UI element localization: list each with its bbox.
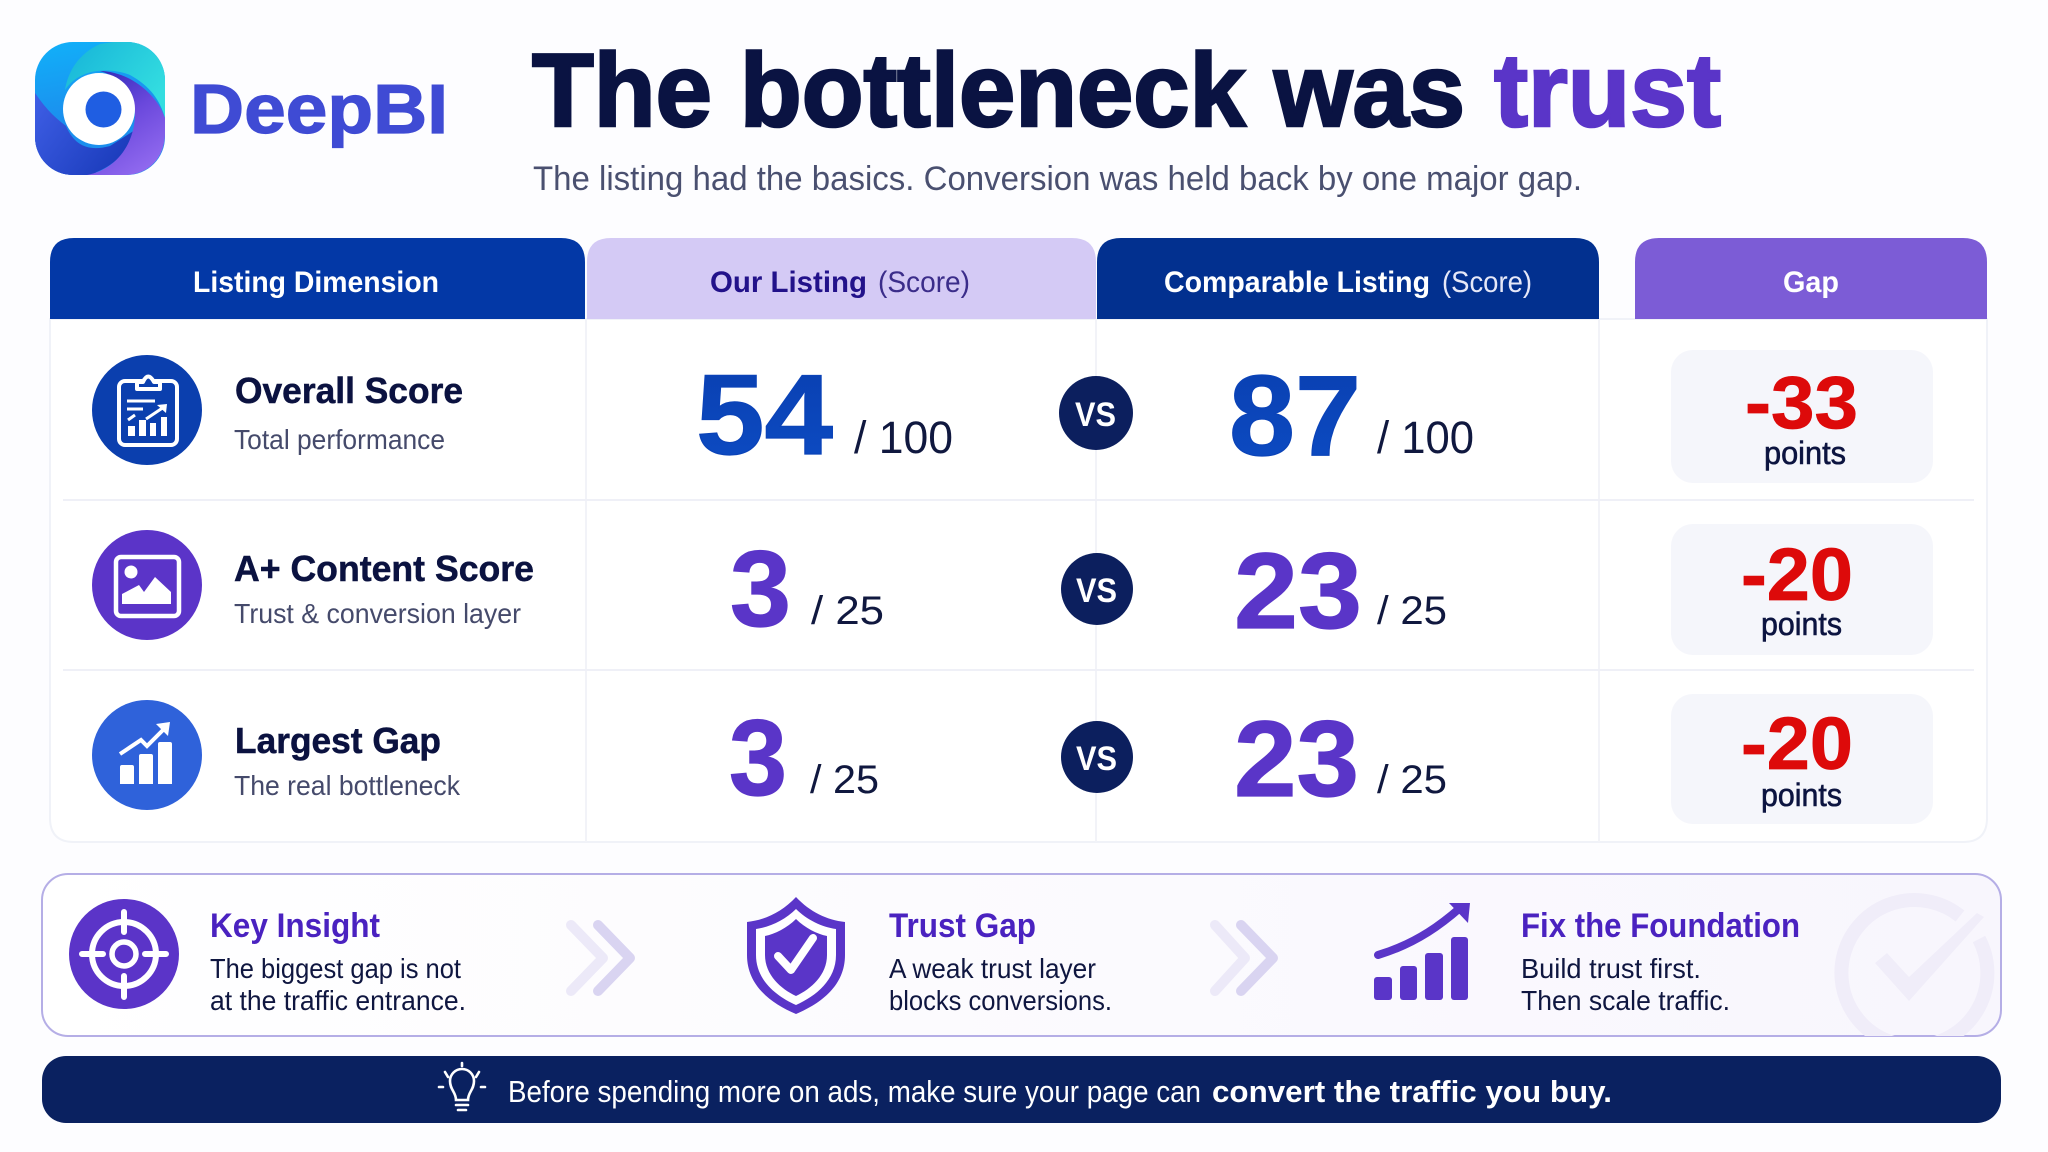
row: A+ Content Score: [92, 524, 1933, 655]
icon: image: [92, 530, 202, 640]
label: Overall Score: Overall Score: [235, 370, 463, 411]
gap: -33 points: points: [1764, 435, 1846, 471]
comparable score: 23 / 25: [1234, 698, 1447, 819]
header: Comparable Listing: (Score): [1442, 266, 1532, 299]
header: Listing Dimension: Listing Dimension: [193, 266, 439, 299]
text: Trust Gap: A weak trust layer: [889, 953, 1096, 984]
header: Comparable Listing: Comparable Listing: [1164, 266, 1430, 299]
subtitle: The listing had the basics. Conversion was held back by one major gap.: [533, 160, 1582, 198]
arrow: chevrons 2: [1215, 925, 1273, 991]
icon: growth bars: [1374, 903, 1470, 1000]
comparable score: 23 / 25: [1234, 530, 1447, 651]
sublabel: Trust & conversion layer: Trust & conversion layer: [234, 598, 521, 629]
text: Fix the Foundation: Build trust first.: [1521, 953, 1701, 984]
row: Largest Gap: [92, 694, 1933, 824]
sublabel: The real bottleneck: The real bottleneck: [234, 770, 461, 801]
gap: -33 points: [1671, 350, 1933, 483]
comparable score: 23 / 25: 23: [1234, 530, 1362, 651]
panel: key insight strip: [42, 874, 2001, 1046]
our score: 54 / 100: / 100: [854, 412, 953, 463]
comparable score: 23 / 25: 23: [1234, 698, 1359, 819]
gap: -20 points: [1671, 694, 1933, 824]
comparable score: 87 / 100: [1229, 353, 1474, 480]
VS badge: [1061, 553, 1133, 625]
text: Trust Gap: blocks conversions.: [889, 985, 1112, 1016]
row: Overall Score: [92, 350, 1933, 483]
header: Our Listing: [587, 238, 1096, 319]
title: trust: [1494, 33, 1721, 149]
comparable score: 23 / 25: / 25: [1377, 758, 1447, 802]
our score: 54 / 100: [696, 352, 953, 479]
comparable score: 23 / 25: / 25: [1377, 589, 1447, 633]
title: The bottleneck was: [532, 33, 1465, 149]
header: Gap: Gap: [1783, 266, 1839, 299]
label: A+ Content Score: A+ Content Score: [234, 548, 534, 589]
text: Key Insight: [210, 907, 466, 1016]
our score: 3 / 25: [730, 528, 884, 649]
logo wordmark: DeepBI: [190, 70, 448, 148]
logo: DeepBI: [35, 42, 448, 175]
text: Trust Gap: Trust Gap: [889, 907, 1036, 945]
our score: 3 / 25: 3: [730, 528, 791, 649]
header: Comparable Listing: [1097, 238, 1599, 319]
label: Largest Gap: Largest Gap: [235, 720, 441, 761]
gap: -20 points: -20: [1741, 533, 1853, 616]
table body: [50, 319, 1987, 842]
our score: 3 / 25: 3: [729, 697, 787, 818]
icon: growth chart: [92, 700, 202, 810]
text: Trust Gap: [889, 907, 1112, 1016]
banner text: convert the traffic you buy.: [1212, 1074, 1612, 1109]
text: Fix the Foundation: Then scale traffic.: [1521, 985, 1730, 1016]
header: Listing Dimension: [50, 238, 585, 319]
sublabel: Total performance: Total performance: [234, 424, 445, 455]
VS badge: [1059, 376, 1133, 450]
our score: 54 / 100: 54: [696, 352, 833, 479]
icon: watermark check: [1841, 900, 1987, 1046]
comparison table: [50, 238, 1987, 842]
icon: shield: [747, 897, 845, 1014]
VS badge: [1061, 721, 1133, 793]
icon: clipboard chart: [92, 355, 202, 465]
arrow: chevrons 1: [571, 925, 630, 991]
callout: bottom banner: [42, 1056, 2001, 1123]
header: Our Listing: Our Listing: [710, 266, 867, 299]
our score: 3 / 25: / 25: [810, 758, 879, 802]
gap: -20 points: points: [1761, 777, 1842, 813]
gap: -20 points: points: [1761, 606, 1842, 642]
header: Our Listing: (Score): [878, 266, 970, 299]
gap: -20 points: -20: [1741, 702, 1853, 785]
text: Key Insight: Key Insight: [210, 907, 380, 945]
text: Fix the Foundation: [1521, 907, 1800, 1016]
VS badge: VS: [1075, 396, 1116, 434]
gap: -20 points: [1671, 524, 1933, 655]
our score: 3 / 25: [729, 697, 879, 818]
header: Gap: [1635, 238, 1987, 319]
icon: light bulb: [439, 1063, 485, 1110]
comparable score: 87 / 100: / 100: [1377, 412, 1474, 463]
text: Fix the Foundation: Fix the Foundation: [1521, 907, 1800, 945]
text: Key Insight: The biggest gap is not: [210, 953, 461, 984]
logo mark: [35, 42, 165, 175]
our score: 3 / 25: / 25: [811, 589, 884, 633]
comparable score: 87 / 100: 87: [1229, 353, 1361, 480]
banner text: Before spending more on ads, make sure your page can: [508, 1074, 1201, 1109]
VS badge: VS: [1076, 572, 1117, 610]
text: Key Insight: at the traffic entrance.: [210, 985, 466, 1016]
icon: target: [69, 899, 179, 1009]
gap: -33 points: -33: [1745, 361, 1858, 444]
VS badge: VS: [1076, 740, 1117, 778]
